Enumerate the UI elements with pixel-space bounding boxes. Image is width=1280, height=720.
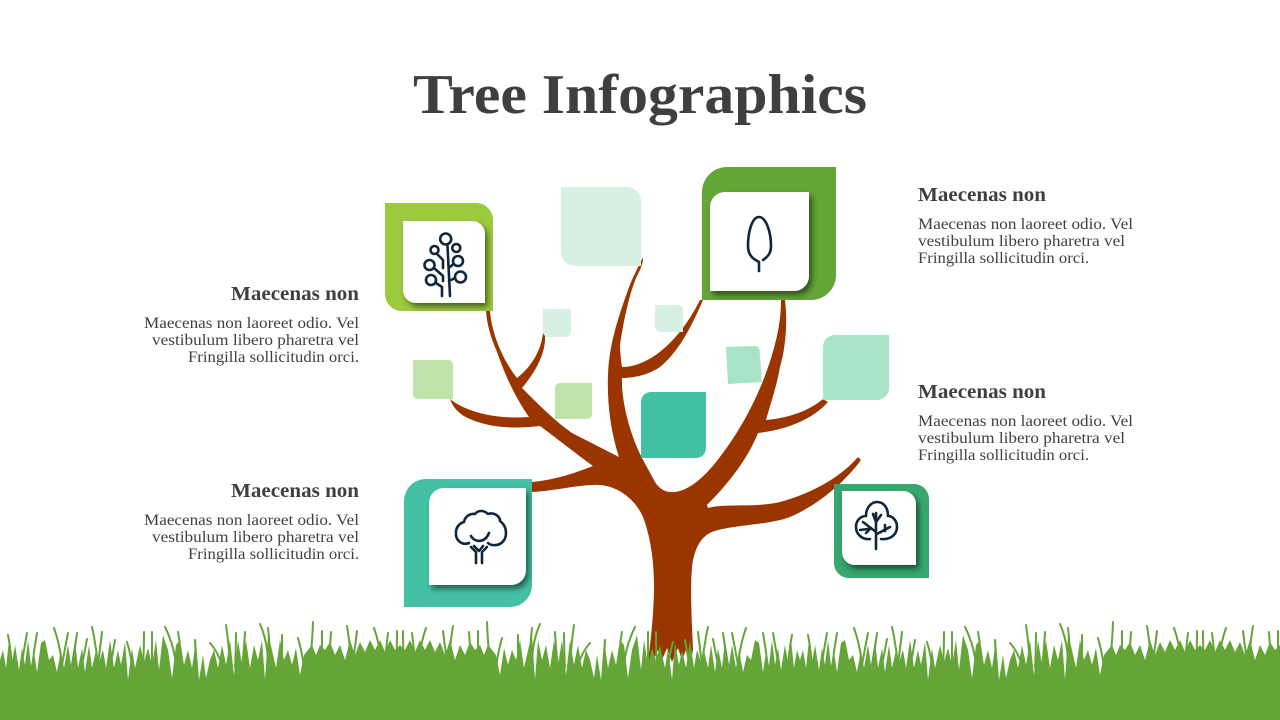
text block: upper right: Fringilla sollicitudin orci. — [918, 250, 1089, 267]
text block: lower left: vestibulum libero pharetra vel — [152, 529, 360, 546]
card: cloud tree icon — [404, 479, 532, 607]
card: round tree icon — [834, 484, 929, 578]
icon: leaf — [748, 217, 771, 271]
decorative leaf: light green left square — [413, 360, 453, 399]
text block: lower right: Fringilla sollicitudin orci. — [918, 447, 1089, 464]
text block: lower left: Maecenas non — [231, 480, 359, 502]
text block: lower right: vestibulum libero pharetra vel — [918, 430, 1126, 447]
text block: upper right: Maecenas non — [918, 184, 1046, 206]
text block: lower left: Maecenas non laoreet odio. Vel — [144, 512, 360, 529]
decorative leaf: teal square — [641, 392, 706, 458]
text block: lower left — [144, 480, 360, 563]
icon: cloud tree — [456, 511, 506, 563]
text block: upper left: Maecenas non laoreet odio. Vel — [144, 315, 360, 332]
decorative leaf: large mint square — [823, 335, 889, 400]
text block: lower right: Maecenas non — [918, 381, 1046, 403]
decorative leaf: tilted mint square — [726, 346, 762, 384]
text block: lower right: Maecenas non laoreet odio. Vel — [918, 413, 1134, 430]
card: leaf icon — [702, 167, 836, 300]
text block: lower right — [918, 381, 1134, 464]
text block: upper right: vestibulum libero pharetra vel — [918, 233, 1126, 250]
card: branching tree icon — [385, 203, 493, 311]
tree trunk and branches — [450, 257, 861, 665]
decorative leaf: small pale square right — [655, 305, 683, 332]
grass — [0, 622, 1280, 720]
title: Tree Infographics — [413, 64, 867, 126]
icon: round tree — [856, 502, 897, 549]
decorative leaf: top pale square — [561, 187, 641, 266]
text block: lower left: Fringilla sollicitudin orci. — [188, 546, 359, 563]
text block: upper right — [918, 184, 1134, 267]
text block: upper left: Fringilla sollicitudin orci. — [188, 349, 359, 366]
decorative leaf: small pale square left — [543, 309, 571, 337]
decorative leaf: light green center square — [555, 383, 592, 419]
icon: branching tree — [424, 234, 466, 296]
text block: upper left: Maecenas non — [231, 283, 359, 305]
text block: upper left — [144, 283, 360, 366]
text block: upper left: vestibulum libero pharetra vel — [152, 332, 360, 349]
text block: upper right: Maecenas non laoreet odio. Vel — [918, 216, 1134, 233]
